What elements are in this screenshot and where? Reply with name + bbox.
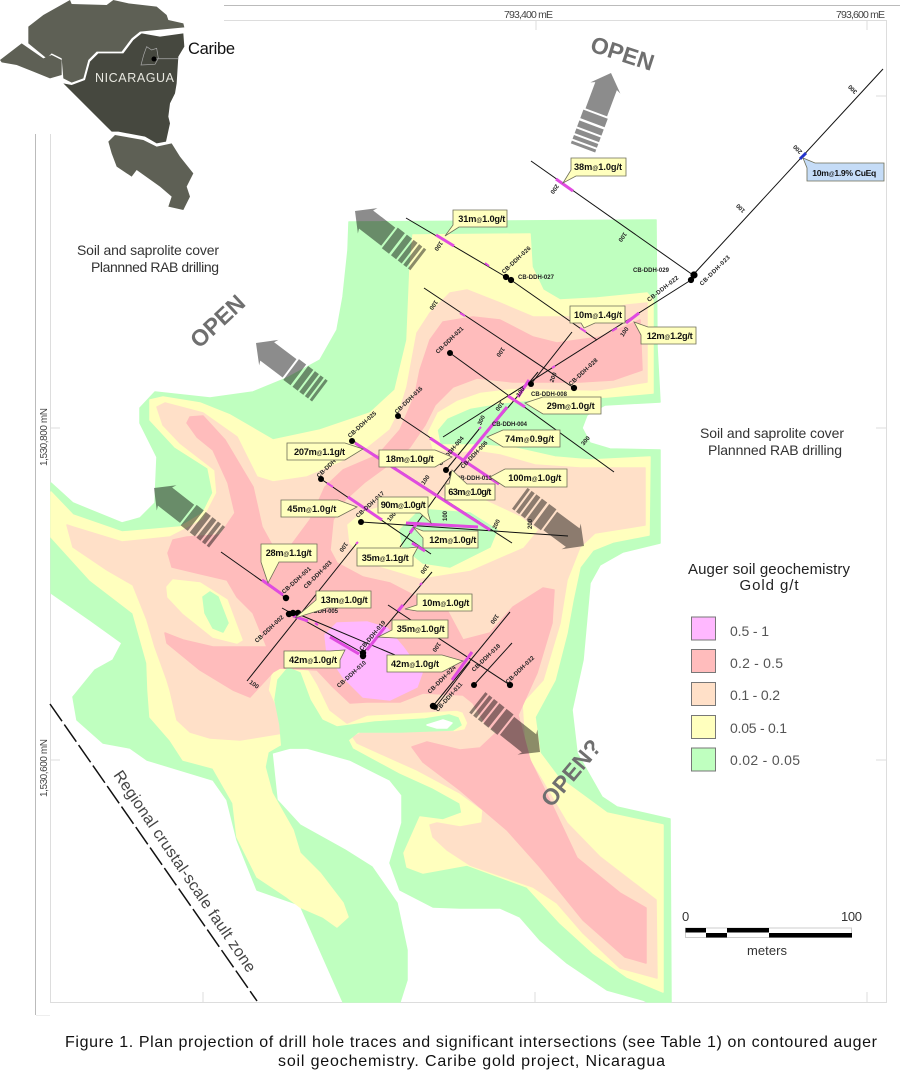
arrow: open north — [568, 67, 626, 154]
legend values: 0.02 - 0.05 — [730, 752, 800, 768]
green inlet south — [275, 668, 461, 748]
downhole depth labels: 200 — [492, 518, 502, 530]
drill collars — [283, 271, 698, 710]
callout: 35m 1.0: 35m@1.0g/t — [397, 624, 445, 634]
minor intersections: thin pink — [315, 263, 617, 625]
callout: 13m — [295, 591, 371, 618]
callout: 28m — [261, 544, 317, 583]
legend values: 0.5 - 1 — [730, 623, 769, 639]
arrow: open south-east centre — [510, 485, 594, 559]
downhole depth labels — [248, 83, 859, 691]
note: soil cover west: Plannned RAB drilling — [91, 259, 219, 275]
downhole depth labels: 100 — [427, 299, 438, 311]
legend values: 0.2 - 0.5 — [730, 655, 783, 671]
yellow island centre — [348, 497, 537, 578]
callout: 18m: 18m@1.0g/t — [386, 454, 434, 464]
callout: 100m — [490, 469, 567, 487]
OPEN label west: OPEN — [185, 289, 250, 353]
callout: 31m: 31m@1.0g/t — [458, 214, 505, 224]
downhole depth labels: 100 — [432, 240, 443, 252]
callout: 90m: 90m@1.0g/t — [381, 500, 426, 510]
grid coordinate labels — [39, 9, 885, 797]
callout: 207m — [287, 443, 363, 460]
downhole depth labels: 100 — [488, 613, 499, 625]
downhole depth labels: 200 — [792, 143, 804, 154]
Nicaragua — [63, 33, 184, 143]
callout: 63m — [445, 470, 495, 500]
hole name labels: CB-DDH-002 — [254, 614, 286, 644]
callout: 12m 1.2 — [634, 322, 696, 344]
callout: 74m — [487, 430, 560, 447]
downhole depth labels: 300 — [847, 83, 859, 94]
contour 0.05-0.1 yellow — [51, 234, 663, 992]
callout: 10m CuEq — [803, 158, 884, 181]
callout: 35m 1.0 — [378, 620, 448, 638]
label: Caribe: Caribe — [188, 40, 235, 58]
hole name labels: CB-DDH-016 — [394, 386, 425, 415]
hole name labels: CB-DDH-032 — [505, 655, 536, 685]
downhole depth labels: 100 — [735, 202, 747, 213]
contour 0.02-0.05 green — [51, 220, 671, 1002]
downhole depth labels: 200 — [548, 183, 559, 195]
contour 0.2-0.5 red — [165, 317, 646, 963]
OPEN label north: OPEN — [587, 31, 657, 76]
legend swatches — [692, 617, 716, 771]
callout: 42m east: 42m@1.0g/t — [391, 659, 439, 669]
hole name labels: CB-DDH-017 — [355, 490, 387, 519]
downhole depth labels: 100 — [421, 474, 432, 486]
note: soil cover west: Soil and saprolite cover — [77, 242, 219, 258]
note: soil cover east: Soil and saprolite cover — [700, 425, 844, 441]
grid coordinate labels: 1,530,600 mN — [39, 739, 50, 797]
hole name labels: CB-DDH-027 — [518, 275, 555, 281]
arrow: open south-east lower — [467, 690, 550, 765]
contour 0.5-1 pink — [325, 622, 422, 700]
hole name labels: CB-DDH-001 — [281, 566, 313, 595]
callout: 63m: 63m@1.0g/t — [448, 487, 491, 497]
hole name labels: CB-DDH-028 — [568, 357, 600, 387]
caption: soil geochemistry. Caribe gold project, Nicaragua — [278, 1053, 665, 1070]
downhole depth labels: 100 — [620, 326, 631, 338]
drill hole traces — [221, 69, 883, 708]
hole name labels: CB-DDH-029 — [633, 268, 670, 274]
legend title: Gold g/t — [740, 577, 799, 594]
hole name labels: CB-DDH-024 — [427, 665, 458, 695]
hole name labels: CB-DDH-018 — [471, 643, 502, 673]
callout: 207m: 207m@1.1g/t — [294, 447, 345, 457]
callout: 10m CuEq: 10m@1.9% CuEq — [812, 168, 876, 178]
caption: Figure 1. Plan projection of drill hole traces and significant intersections (see Table 1) on contoured auger — [65, 1034, 878, 1051]
Honduras — [28, 0, 184, 83]
yellow island west — [167, 580, 242, 643]
hole name labels: CB-DDH-010 — [336, 660, 368, 689]
downhole depth labels: 100 — [430, 641, 441, 653]
callout: 38m — [563, 158, 626, 183]
hole name labels: CB-DDH-023 — [699, 254, 732, 287]
callout: 18m — [379, 450, 452, 467]
downhole depth labels: 100 — [418, 563, 429, 575]
note: soil cover west — [77, 242, 219, 275]
callout: 35m 1.1 — [357, 547, 418, 566]
downhole depth labels: 100 — [248, 680, 260, 691]
hole name labels: CB-DDH-021 — [435, 326, 466, 355]
callout: 45m — [281, 500, 357, 517]
downhole depth labels: 300 — [581, 435, 592, 447]
inset map: Nicaragua location — [0, 0, 235, 210]
OPEN? label south-east: OPEN? — [535, 734, 606, 812]
hole name labels: CB-DDH-006 — [460, 440, 490, 470]
callout: 13m: 13m@1.0g/t — [321, 595, 368, 605]
callout: 42m west: 42m@1.0g/t — [289, 655, 337, 665]
legend — [688, 561, 850, 771]
arrow: open west lower — [144, 475, 227, 550]
contour 0.1-0.2 peach — [67, 290, 657, 978]
callout: 29m — [525, 397, 601, 414]
scale labels: 0 — [682, 909, 689, 924]
significant intersections: thick pink — [262, 179, 639, 680]
callout: 42m west — [284, 650, 345, 668]
hole name labels: CB-DDH-005 — [303, 609, 339, 615]
callout: 38m: 38m@1.0g/t — [574, 162, 622, 172]
callout: 12m 1.2: 12m@1.2g/t — [647, 331, 693, 341]
arrow: open west — [246, 330, 330, 404]
callout: 45m: 45m@1.0g/t — [287, 504, 336, 514]
hole name labels: CB-DDH-026 — [501, 245, 533, 275]
contour map: auger soil geochemistry — [51, 220, 671, 1002]
legend title — [688, 561, 850, 594]
callout: 31m — [445, 210, 507, 236]
grid coordinate labels: 1,530,800 mN — [39, 408, 50, 466]
callout: 100m: 100m@1.0g/t — [508, 473, 561, 483]
note: soil cover east — [700, 425, 844, 458]
copper intersection: blue — [800, 153, 806, 159]
downhole depth labels: 100 — [443, 510, 449, 521]
downhole depth labels: 200 — [550, 371, 559, 383]
project outline — [141, 47, 158, 65]
hole name labels: CB-DDH-025 — [347, 410, 379, 439]
hole name labels: CB-DDH-013 — [456, 476, 493, 482]
callout: 28m: 28m@1.1g/t — [266, 548, 312, 558]
legend title: Auger soil geochemistry — [688, 561, 850, 578]
El Salvador — [0, 43, 62, 78]
downhole depth labels: 100 — [494, 346, 505, 358]
callout: 29m: 29m@1.0g/t — [547, 401, 595, 411]
downhole depth labels: 200 — [528, 518, 534, 529]
callout: 12m 1.0: 12m@1.0g/t — [429, 535, 476, 545]
project dot — [151, 56, 156, 61]
grid coordinate labels: 793,600 mE — [836, 9, 885, 21]
downhole depth labels: 100 — [493, 400, 504, 412]
downhole depth labels: 100 — [387, 511, 398, 523]
hole name labels: CB-DDH-022 — [647, 275, 681, 304]
hole name labels — [254, 245, 732, 713]
hole name labels: CB-DDH-019 — [359, 620, 388, 652]
hole name labels: CB-DDH-011 — [435, 681, 465, 713]
legend values: 0.05 - 0.1 — [730, 720, 787, 736]
grid coordinate labels: 793,400 mE — [504, 9, 553, 21]
white core — [427, 720, 452, 728]
legend values: 0.1 - 0.2 — [730, 687, 780, 703]
callout: 74m: 74m@0.9g/t — [505, 434, 554, 444]
callout: 35m 1.1: 35m@1.1g/t — [362, 553, 409, 563]
leader line — [156, 57, 178, 60]
callout: 10m 1.0 — [405, 594, 472, 611]
hole name labels: CB-DDH-015 — [316, 450, 347, 479]
downhole depth labels: 100 — [516, 386, 527, 398]
note: soil cover east: Plannned RAB drilling — [708, 442, 842, 458]
callout: 10m 1.0: 10m@1.0g/t — [422, 598, 469, 608]
callout: 12m 1.0 — [413, 527, 478, 548]
green patch west — [203, 592, 228, 632]
hole name labels: CB-DDH-004 — [438, 435, 466, 467]
hole name labels: CB-DDH-008 — [531, 392, 568, 398]
scale labels: 100 — [841, 909, 862, 924]
hole name labels: CB-DDH-003 — [303, 560, 334, 590]
green patch centre — [400, 510, 497, 567]
hole name labels: CB-DDH-004 — [492, 422, 528, 428]
label: NICARAGUA: NICARAGUA — [95, 71, 175, 85]
scale labels — [682, 909, 862, 958]
arrow: open north-west upper — [345, 198, 428, 273]
scale labels: meters — [747, 943, 788, 958]
downhole depth labels: 300 — [477, 414, 487, 426]
legend values — [730, 623, 800, 768]
callout: 42m east — [387, 655, 463, 672]
callout: 10m 1.4: 10m@1.4g/t — [574, 310, 622, 320]
Costa Rica — [108, 135, 193, 210]
callout: 10m 1.4 — [570, 306, 625, 328]
caption — [65, 1034, 878, 1070]
downhole depth labels: 100 — [616, 231, 627, 243]
callout: 90m — [378, 497, 431, 523]
regional fault line — [50, 704, 257, 1001]
scale bar — [682, 909, 862, 958]
downhole depth labels: 100 — [337, 541, 348, 553]
regional fault label: Regional crustal-scale fault zone — [110, 768, 259, 976]
